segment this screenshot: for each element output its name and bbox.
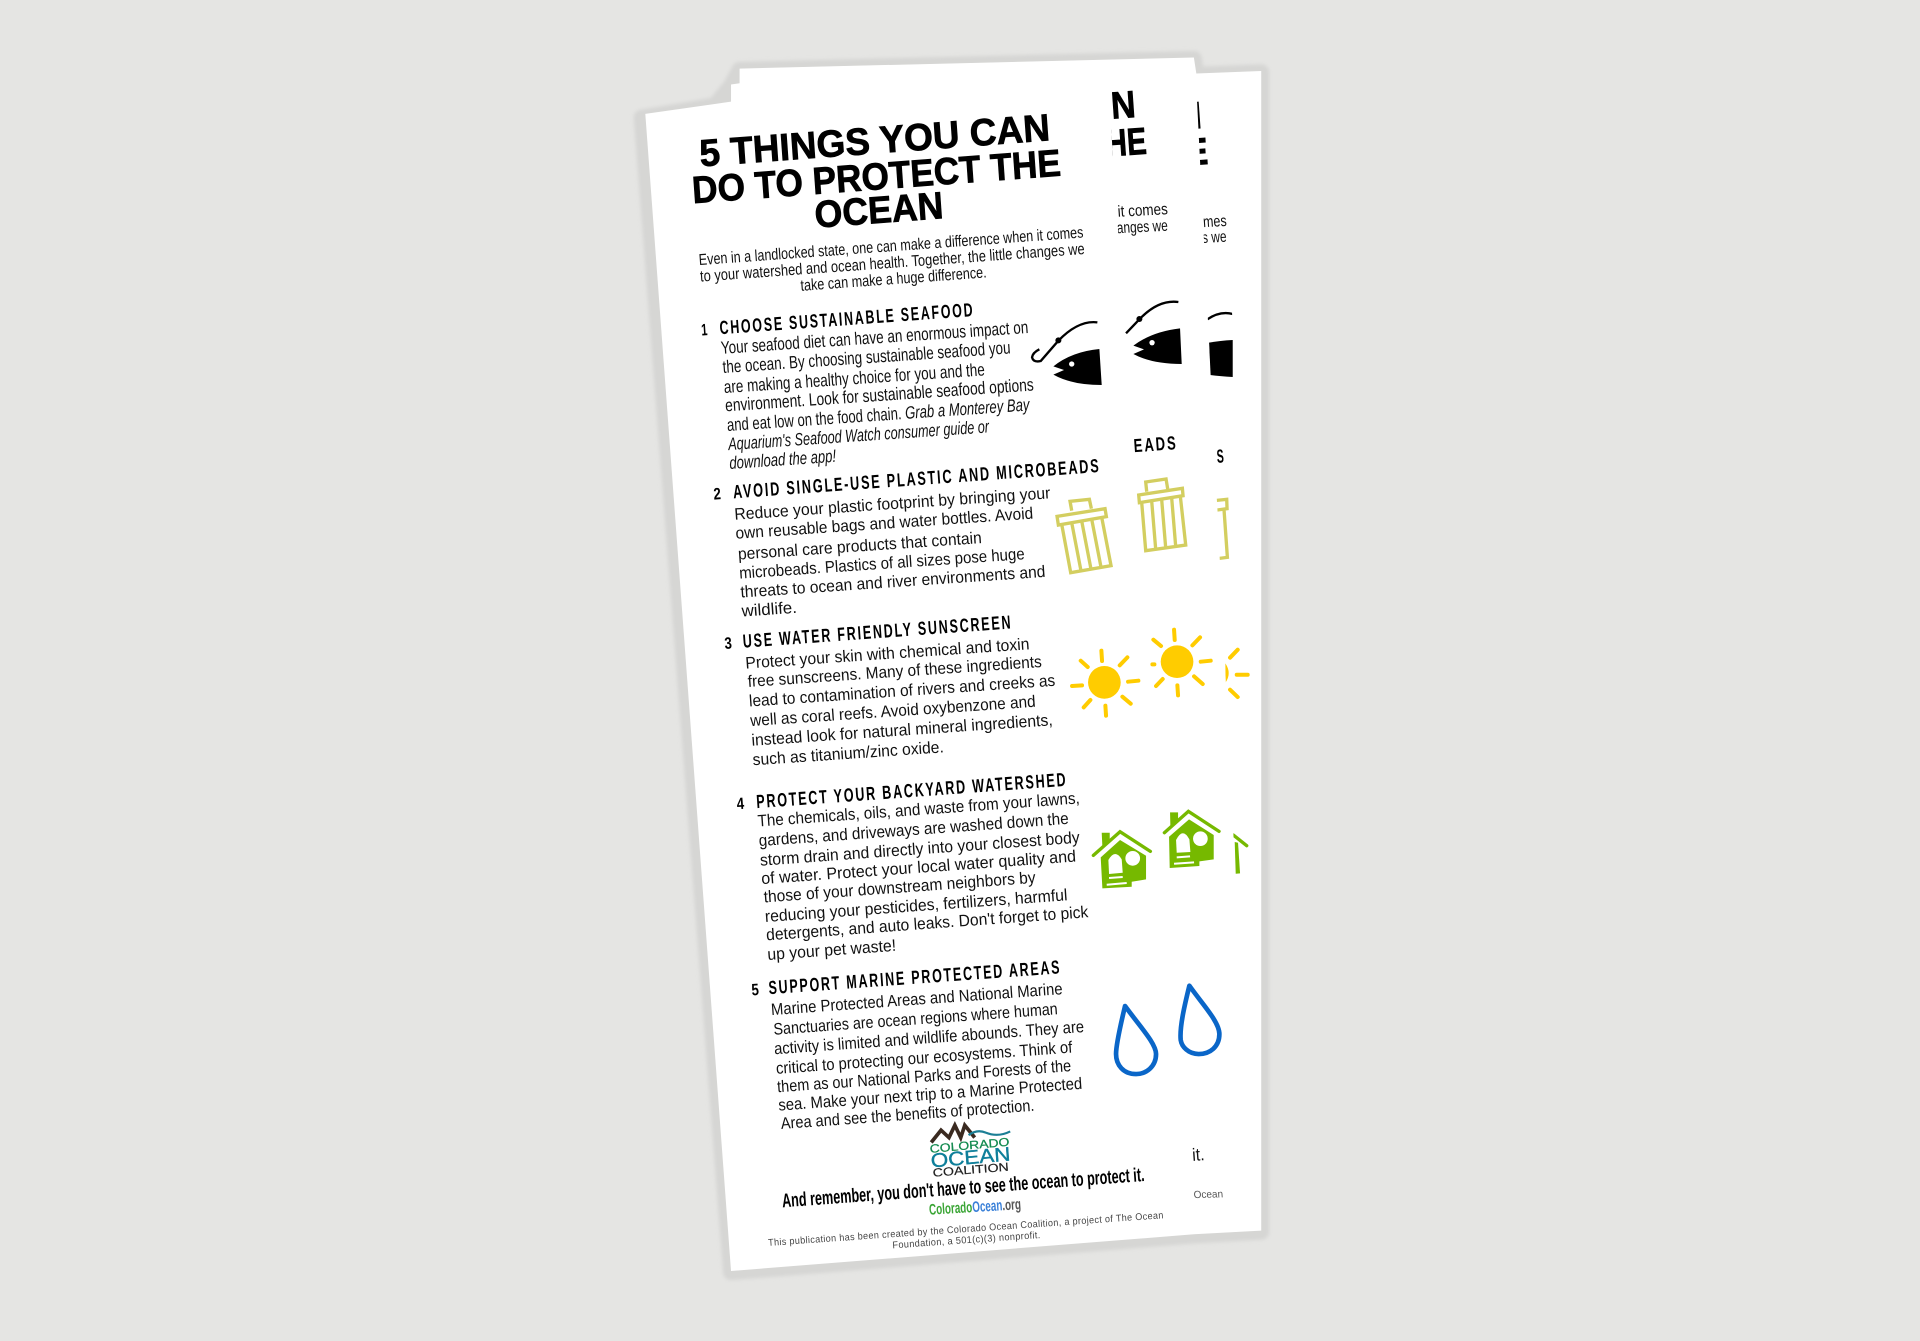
section 3 heading: USE WATER FRIENDLY SUNSCREEN (742, 612, 1013, 653)
section 2 heading (713, 456, 1101, 504)
logo: Colorado Ocean Coalition: COALITION (932, 1161, 1009, 1180)
logo: Colorado Ocean Coalition: COLORADO (929, 1136, 1010, 1156)
section 5 body: Marine Protected Areas and National Marine (770, 979, 1063, 1019)
icon: water drop (1116, 1006, 1156, 1074)
second sheet closing fragment: it. (1192, 1144, 1205, 1165)
logo mountains (931, 1125, 975, 1142)
section 5 body: critical to protecting our ecosystems. Think of (775, 1038, 1073, 1078)
section 4 heading: PROTECT YOUR BACKYARD WATERSHED (756, 770, 1068, 813)
section 1 heading: CHOOSE SUSTAINABLE SEAFOOD (719, 300, 975, 339)
third sheet title fragment (1197, 102, 1208, 165)
icon: sun (1072, 651, 1138, 716)
section 2 body: microbeads. Plastics of all sizes pose huge (739, 544, 1025, 583)
back page fragments: second sheet (1111, 90, 1223, 1198)
logo wave (969, 1131, 1010, 1135)
icon: third sheet house (1233, 835, 1247, 874)
section 3 body (745, 634, 1056, 769)
section 2 body (734, 483, 1051, 621)
second sheet closing fragment: Ocean (1193, 1189, 1224, 1201)
section 5 body: them as our National Parks and Forests of the (777, 1056, 1072, 1096)
third sheet intro fragment: changes we (1162, 229, 1227, 249)
second sheet intro fragment: it comes (1117, 201, 1168, 221)
second sheet title fragment (1111, 90, 1146, 156)
intro text: to your watershed and ocean health. Together, the little changes we (700, 241, 1085, 286)
section 4 body (757, 788, 1090, 964)
icon: second sheet sun (1152, 630, 1211, 695)
third sheet title fragment: E (1188, 131, 1209, 174)
section 3 body: such as titanium/zinc oxide. (752, 737, 944, 769)
icon: fish and hook (1032, 322, 1102, 385)
icon: second sheet house (1164, 811, 1219, 868)
logo: Colorado Ocean Coalition: OCEAN (930, 1143, 1011, 1173)
section 4 body: detergents, and auto leaks. Don't forget to pick (765, 902, 1090, 944)
section 4 body: those of your downstream neighbors by (763, 868, 1037, 906)
intro text: take can make a huge difference. (800, 264, 987, 295)
logo: Colorado Ocean Coalition (929, 1125, 1011, 1180)
section 1: choose sustainable seafood (701, 300, 1102, 473)
section 4 body: of water. Protect your local water quality and (761, 846, 1077, 888)
section 2 heading: AVOID SINGLE-USE PLASTIC AND MICROBEADS (732, 456, 1101, 503)
second sheet intro fragment (1118, 205, 1168, 236)
section 2: avoid single-use plastic (713, 456, 1111, 621)
section 1 body: Aquarium's Seafood Watch consumer guide or (727, 416, 990, 454)
section 1 body: download the app! (729, 446, 837, 473)
section 2 body: own reusable bags and water bottles. Avoid (735, 504, 1034, 543)
closing tagline: And remember, you don't have to see the ocean to protect it. (781, 1164, 1145, 1212)
section 5 body: Sanctuaries are ocean regions where human (773, 999, 1058, 1039)
section 1 body: the ocean. By choosing sustainable seafood you (722, 337, 1011, 377)
section 3 heading (724, 612, 1013, 653)
page stack shadow (642, 59, 1261, 1272)
section 4 body: The chemicals, oils, and waste from your lawns, (757, 788, 1080, 831)
intro text: Even in a landlocked state, one can make a difference when it comes (698, 224, 1084, 269)
icon: third sheet fish (1207, 313, 1233, 377)
section 4 heading: 4 (736, 794, 745, 813)
second sheet intro fragment: changes we (1104, 218, 1169, 238)
section 1 body: environment. Look for sustainable seafood options (724, 374, 1034, 415)
second sheet closing fragment (1192, 1148, 1223, 1198)
section 5 heading: SUPPORT MARINE PROTECTED AREAS (768, 957, 1062, 999)
section 2 body: threats to ocean and river environments and (740, 562, 1046, 602)
icon: house (1093, 832, 1150, 888)
back page fragments: third sheet (1197, 102, 1250, 874)
section 3: water friendly sunscreen (724, 612, 1138, 769)
title (691, 107, 1062, 237)
icon: third sheet sun (1225, 650, 1248, 697)
publication credit: Foundation, a 501(c)(3) nonprofit. (892, 1230, 1041, 1251)
section 4 body: reducing your pesticides, fertilizers, harmful (764, 885, 1068, 926)
section 5: support marine protected areas (751, 957, 1156, 1133)
icon: trash can (1057, 499, 1111, 573)
section 2 body: personal care products that contain (737, 528, 982, 564)
second sheet title fragment: N (1110, 84, 1137, 128)
section 1 body: and eat low on the food chain. Grab a Monterey Bay (726, 394, 1031, 435)
section 2 body: wildlife. (740, 598, 797, 621)
section 5 heading: 5 (751, 980, 759, 1000)
icon: second sheet water drop (1181, 986, 1219, 1054)
section 1 heading (701, 300, 975, 340)
section 3 body: Protect your skin with chemical and toxin (745, 634, 1030, 673)
third sheet intro fragment: comes (1189, 213, 1227, 232)
title: 5 THINGS YOU CAN (698, 107, 1051, 176)
section 5 heading (751, 957, 1062, 1000)
publication credit: This publication has been created by the Colorado Ocean Coalition, a project of The Ocean (768, 1210, 1164, 1249)
section 1 heading: 1 (701, 320, 708, 340)
intro text (698, 224, 1085, 295)
website link: ColoradoOcean.org (928, 1196, 1022, 1219)
third sheet intro fragment (1204, 218, 1226, 243)
section 5 body: activity is limited and wildlife abounds. They are (773, 1017, 1085, 1058)
section 2 heading: 2 (713, 484, 722, 504)
second sheet heading fragment: BEADS (1122, 433, 1178, 458)
page stack (645, 58, 1261, 1271)
section 3 heading: 3 (724, 633, 733, 653)
section 5 body (770, 979, 1085, 1133)
section 1 body (720, 317, 1034, 473)
section 5 body: sea. Make your next trip to a Marine Protected (778, 1074, 1083, 1115)
section 3 body: free sunscreens. Many of these ingredients (747, 652, 1042, 691)
title: OCEAN (813, 185, 945, 237)
section 1 body: Your seafood diet can have an enormous impact on (720, 317, 1029, 358)
section 4 heading (736, 770, 1068, 813)
title: DO TO PROTECT THE (691, 143, 1062, 212)
icon: third sheet trash can (1217, 499, 1227, 558)
section 3 body: well as coral reefs. Avoid oxybenzone and (749, 692, 1036, 730)
section 4: protect your backyard watershed (736, 770, 1150, 964)
second sheet title fragment: THE (1086, 121, 1148, 167)
icon: second sheet trash can (1139, 479, 1186, 551)
section 4 body: storm drain and directly into your closest body (759, 828, 1081, 870)
section 2 body: Reduce your plastic footprint by bringing your (734, 483, 1051, 524)
icon: second sheet fish (1126, 302, 1182, 364)
section 1 body: are making a healthy choice for you and the (723, 359, 985, 397)
section 4 body: gardens, and driveways are washed down the (758, 809, 1069, 850)
third sheet title fragment: N (1176, 95, 1203, 139)
section 3 body: lead to contamination of rivers and creeks as (748, 671, 1056, 711)
section 3 body: instead look for natural mineral ingredients, (751, 710, 1053, 750)
section 5 body: Area and see the benefits of protection. (780, 1096, 1035, 1133)
third sheet heading fragment: S (1216, 446, 1226, 468)
section 4 body: up your pet waste! (767, 936, 897, 964)
